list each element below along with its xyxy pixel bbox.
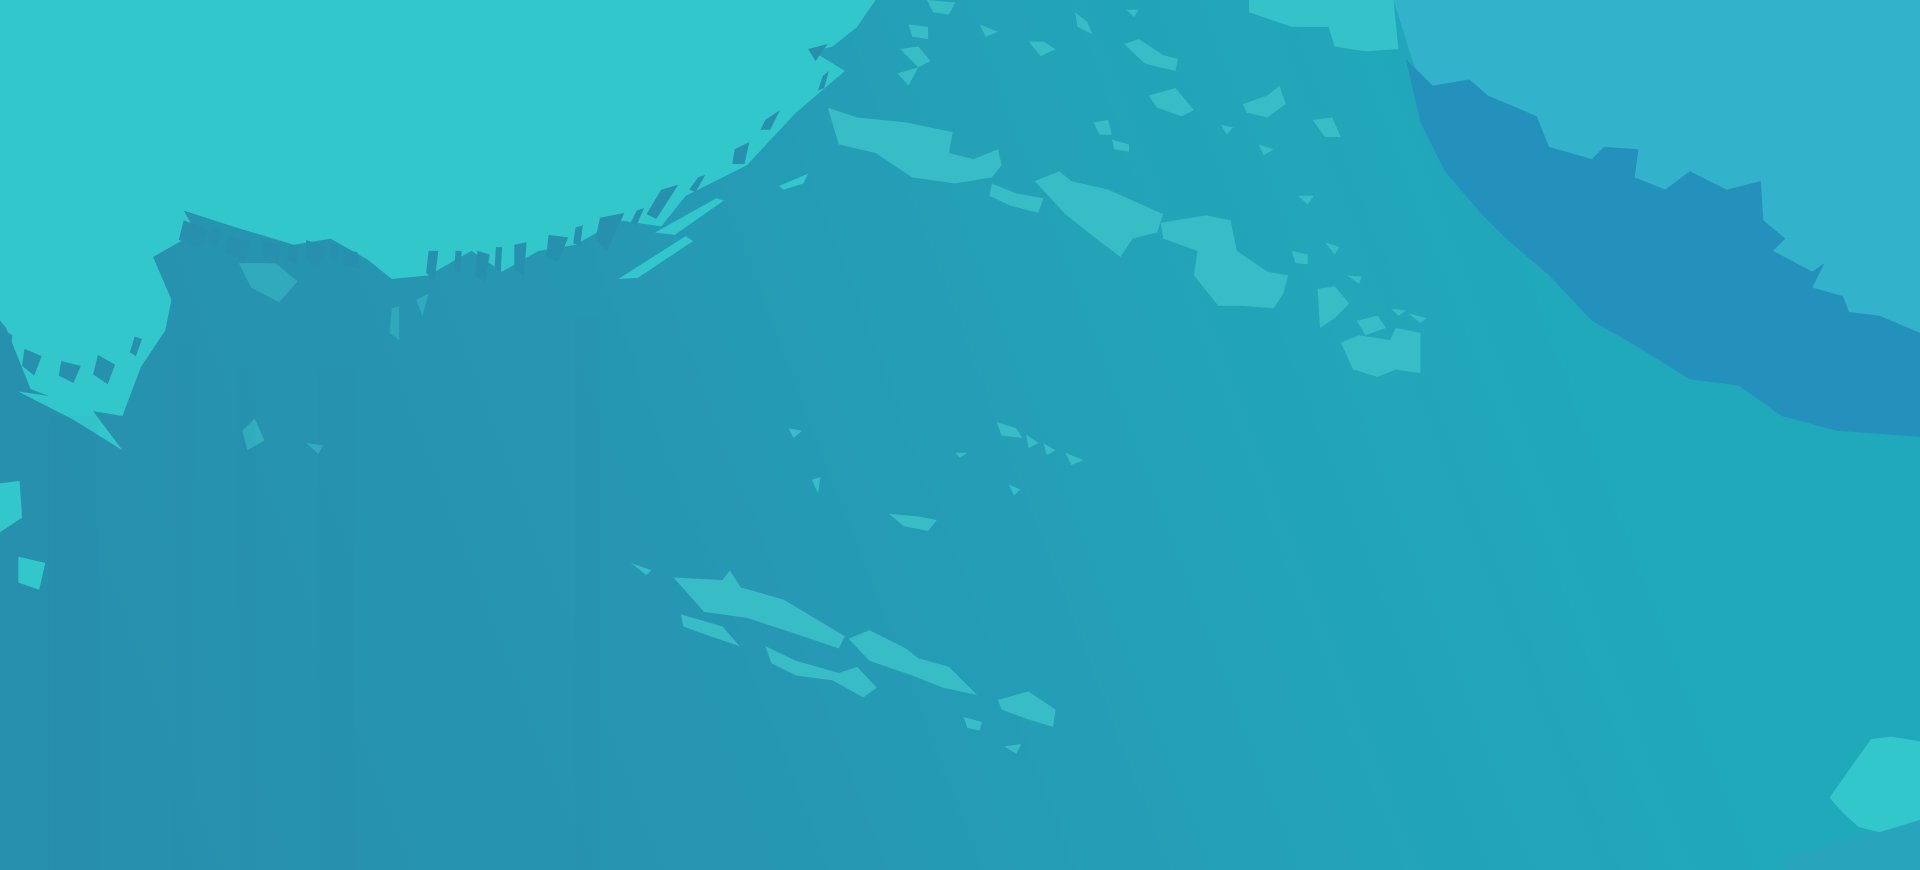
vertical brush streaks — [49, 318, 600, 870]
brush flecks along edge — [5, 44, 829, 384]
panel: dark blue brush band — [1406, 59, 1920, 437]
paint splotches — [239, 0, 1427, 754]
top turquoise sliver — [1249, 0, 1398, 51]
panel: top-right light blue shape — [1393, 0, 1920, 367]
panel: top-left turquoise brush shape — [0, 0, 876, 416]
panel: bottom-right turquoise blob — [1829, 737, 1920, 832]
bottom-right blue corner — [1785, 820, 1920, 870]
